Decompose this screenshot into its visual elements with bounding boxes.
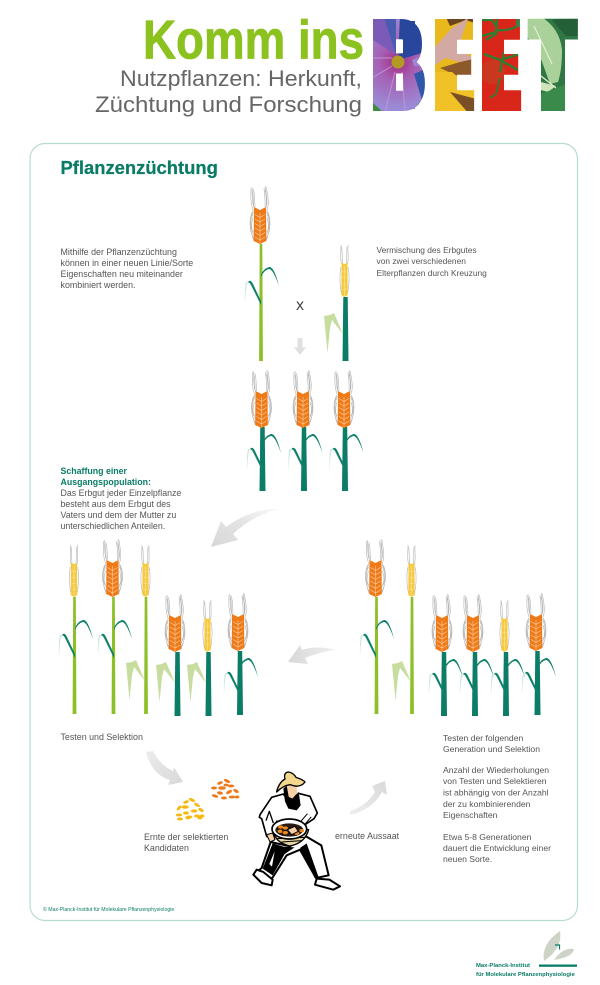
farmer: hands xyxy=(267,826,298,842)
logo: Max Planck Institute: Max-Planck-Institut xyxy=(476,963,530,969)
subtitle: Züchtung und Forschung xyxy=(95,92,362,117)
seeds: yellow xyxy=(176,797,204,820)
text: next generation testing: dauert die Entwicklung einer xyxy=(443,843,551,853)
subtitle: Nutzpflanzen: Herkunft, xyxy=(120,66,362,91)
text: starting population: Das Erbgut jeder Einzelpflanze xyxy=(60,488,181,498)
heading: Pflanzenzüchtung: Pflanzenzüchtung xyxy=(60,157,218,178)
plants: right group xyxy=(360,539,556,716)
text: next generation testing: Testen der folgenden xyxy=(443,733,523,743)
text: next generation testing: Generation und Selektion xyxy=(443,744,540,754)
text: starting population: besteht aus dem Erbgut des xyxy=(60,499,171,509)
parent plant: yellow xyxy=(324,245,349,361)
text: introduction: können in einer neuen Linie/Sorte xyxy=(60,258,193,268)
text: starting population: Schaffung einer xyxy=(60,466,128,476)
text: next generation testing: von Testen und Selektieren xyxy=(443,776,547,786)
title word: BEET with picture fill: E xyxy=(435,0,475,134)
seeds: orange xyxy=(211,778,240,800)
arrow: to harvest xyxy=(146,751,183,785)
farmer: basket xyxy=(273,830,309,846)
logo: Max Planck Institute: für Molekulare Pflanzenphysiologie xyxy=(476,972,576,978)
farmer: face xyxy=(287,783,297,799)
text: starting population: Ausgangspopulation: xyxy=(60,477,151,487)
offspring row xyxy=(247,370,364,491)
text: next generation testing: Anzahl der Wiederholungen xyxy=(443,765,549,775)
title word: BEET with picture fill xyxy=(372,0,576,134)
farmer: hair and beard xyxy=(283,785,301,810)
text: introduction: Eigenschaften neu miteinander xyxy=(60,269,183,279)
farmer figure xyxy=(253,772,340,890)
text: crossing: Elterpflanzen durch Kreuzung xyxy=(376,268,487,278)
panel: plant breeding xyxy=(30,144,578,920)
farmer: shirt xyxy=(259,793,317,840)
cross symbol: x xyxy=(296,297,304,314)
text: introduction xyxy=(60,247,193,290)
text: re-sowing: erneute Aussaat xyxy=(335,831,400,841)
arrow: to next generation xyxy=(350,781,387,815)
farmer: trouser shading xyxy=(263,843,319,878)
arrow: between groups xyxy=(288,645,335,664)
title: Komm ins: Komm ins xyxy=(143,8,364,70)
copyright: © Max-Planck-Institut für Molekulare Pflanzenphysiologie xyxy=(43,906,174,913)
title word: BEET with picture fill: E xyxy=(482,0,522,134)
text: crossing: Vermischung des Erbgutes xyxy=(376,245,477,255)
farmer: trousers xyxy=(257,836,329,881)
arrow: to selection row xyxy=(211,509,278,547)
plants: left group xyxy=(59,539,258,716)
farmer: shoes xyxy=(253,870,273,885)
text: next generation testing: der zu kombinierenden xyxy=(443,799,531,809)
text: harvest: Ernte der selektierten xyxy=(144,832,228,842)
text: next generation testing: Etwa 5-8 Generationen xyxy=(443,832,532,842)
text: starting population xyxy=(60,466,181,531)
text: next generation testing: ist abhängig von der Anzahl xyxy=(443,788,549,798)
text: harvest: Kandidaten xyxy=(144,843,189,853)
subtitle xyxy=(95,66,362,117)
text: crossing: von zwei verschiedenen xyxy=(376,256,466,266)
text: next generation testing xyxy=(443,733,551,864)
text: harvest xyxy=(144,832,228,853)
text: testing and selection: Testen und Selektion xyxy=(60,732,143,742)
text: introduction: Mithilfe der Pflanzenzüchtung xyxy=(60,247,177,257)
title word: BEET with picture fill: B xyxy=(372,0,426,134)
logo: Max Planck Institute xyxy=(476,931,577,978)
text: starting population: Vaters und dem der Mutter zu xyxy=(60,510,176,520)
text: introduction: kombiniert werden. xyxy=(60,280,135,290)
arrow: down xyxy=(294,338,306,355)
text: next generation testing: neuen Sorte. xyxy=(443,854,492,864)
parent plant: orange xyxy=(245,186,279,361)
text: starting population: unterschiedlichen Anteilen. xyxy=(60,521,165,531)
text: crossing xyxy=(376,245,487,278)
farmer: hat xyxy=(277,772,305,792)
text: next generation testing: Eigenschaften xyxy=(443,810,498,820)
